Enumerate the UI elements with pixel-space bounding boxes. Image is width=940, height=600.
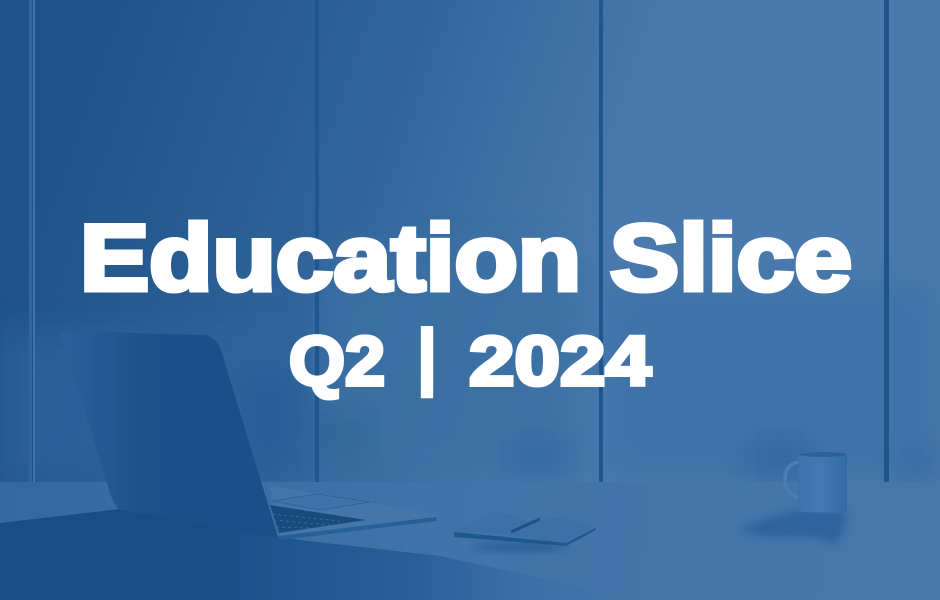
icon: laptop	[60, 331, 437, 540]
subtitle: |	[420, 318, 434, 395]
window mullions	[29, 0, 889, 482]
icon: coffee mug	[740, 452, 847, 545]
icon: notebook and pencil	[454, 513, 596, 552]
subtitle: 2024	[469, 322, 651, 400]
title: Education Slice	[80, 205, 852, 310]
subtitle: Q2	[289, 322, 385, 400]
desk surface	[0, 482, 940, 600]
subtitle	[289, 318, 651, 400]
